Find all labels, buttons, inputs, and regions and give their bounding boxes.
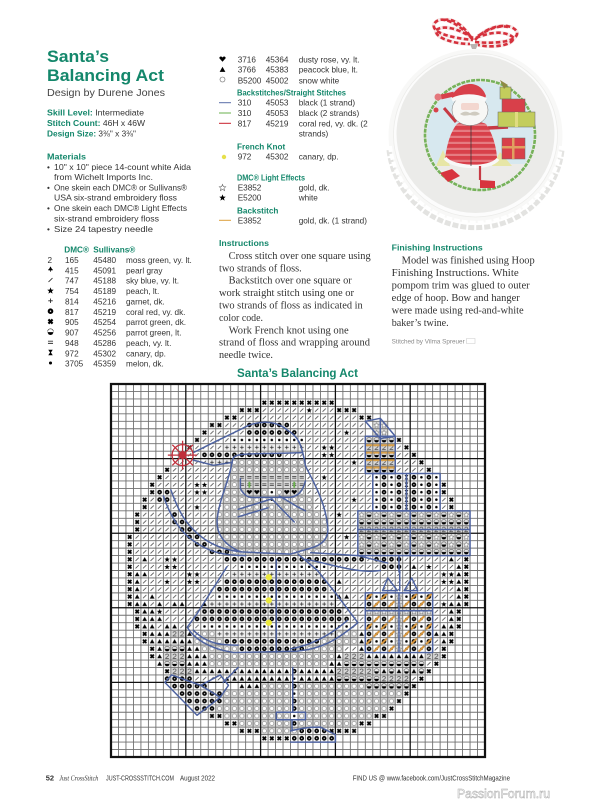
backstitch key: 45053 [266, 109, 289, 118]
chart border [111, 384, 485, 757]
stitched design [425, 80, 535, 194]
materials list: One skein each DMC® or Sullivans® [54, 183, 187, 192]
chart: santa face stitches [216, 459, 328, 556]
light effects key: DMC® Light Effects [237, 174, 305, 183]
instructions: two strands of floss as indicated in [219, 301, 363, 312]
floss key continued: 45002 [266, 76, 289, 85]
backstitch key: strands) [299, 130, 329, 139]
instructions: Backstitch over one square or [229, 276, 352, 287]
floss color key table: 817 [65, 308, 79, 317]
page number: 52 [46, 773, 54, 782]
gifts [498, 80, 535, 159]
title: Santa’s [47, 47, 109, 66]
chart: red gift stitches [373, 474, 440, 511]
hoop with pompom trim [388, 49, 562, 228]
designer credit: Design by Durene Jones [47, 87, 165, 99]
chart: red star pompom [168, 441, 197, 470]
backstitch key: 310 [238, 109, 252, 118]
project specs: Design Size: 3⅜" x 3⅜" [47, 129, 136, 138]
floss key continued: 3716 [238, 55, 256, 64]
finishing text: pompom trim was glued to outer [392, 281, 530, 292]
floss color key table: 45216 [93, 298, 117, 306]
floss color key table: 972 [65, 349, 79, 358]
project specs [47, 109, 145, 138]
floss color key table: 45188 [93, 277, 117, 286]
chart: hat and coat flower stripes [156, 421, 403, 742]
materials list: USA six-strand embroidery floss [54, 194, 177, 203]
materials list: • [47, 225, 50, 234]
materials list: • [47, 163, 50, 172]
floss color key table: peach, lt. [126, 287, 159, 296]
materials list [47, 163, 191, 234]
twine bow and hanger [434, 20, 517, 49]
floss color key table: 948 [65, 339, 79, 348]
floss key continued: peacock blue, lt. [299, 66, 358, 75]
instructions: Work French knot using one [229, 325, 349, 336]
materials list: from Wichelt Imports Inc. [54, 173, 153, 182]
light effects key [219, 174, 367, 226]
french knot key: 972 [238, 153, 252, 162]
panel: key continued and instructions column [219, 55, 371, 361]
light effects key: white [298, 194, 318, 203]
chart: boot stitches [163, 675, 223, 712]
chart: lower gift stitches [365, 593, 433, 653]
floss color key table: 3705 [65, 360, 84, 369]
backstitch key: black (1 strand) [299, 99, 355, 108]
stitcher credit: Stitched by Vilma Spreuer [392, 338, 465, 345]
floss color key table: 814 [65, 298, 79, 306]
chart title: Santa’s Balancing Act [237, 368, 358, 380]
light effects key: Backstitch [237, 207, 278, 216]
backstitch key: 817 [238, 119, 252, 128]
materials list: • [47, 204, 50, 213]
floss color key table: moss green, vy. lt. [126, 256, 192, 265]
panel: finishing instructions [392, 244, 535, 345]
floss color key table: parrot green, lt. [126, 329, 182, 338]
light effects key: E3852 [238, 217, 262, 226]
chart: coat plus stripes [208, 444, 335, 638]
floss color key table: 747 [65, 277, 79, 286]
chart: parrot green stitches [163, 436, 470, 690]
backstitch key: 45219 [266, 119, 289, 128]
floss color key table: 2 [48, 256, 52, 265]
floss color key table: 45254 [93, 318, 117, 327]
floss color key table: coral red, vy. dk. [126, 308, 185, 317]
floss key continued: snow white [299, 76, 340, 85]
floss color key table: 45480 [93, 256, 117, 265]
floss key continued [219, 55, 360, 85]
instructions: Instructions [219, 239, 269, 248]
panel: pattern info column [47, 47, 192, 369]
floss color key table: 415 [65, 266, 79, 275]
french knot key: French Knot [237, 142, 285, 151]
chart: coat dot stripes [201, 436, 350, 720]
floss key continued: 3766 [238, 66, 256, 75]
facebook link: FIND US @ www.facebook.com/JustCrossStitchMagazine [353, 773, 510, 782]
floss color key table: 45256 [93, 329, 117, 338]
floss key continued: 45383 [266, 66, 289, 75]
backstitch key: 45053 [266, 99, 289, 108]
floss color key table: 45286 [93, 339, 117, 348]
icon: finish mark [466, 338, 475, 344]
floss color key table: melon, dk. [126, 360, 164, 369]
light effects key: gold, dk. (1 strand) [299, 217, 367, 226]
finishing text: baker’s twine. [392, 318, 449, 329]
cross stitch chart [111, 384, 485, 757]
project specs: Skill Level: Intermediate [47, 109, 144, 118]
finishing text: Model was finished using Hoop [402, 255, 535, 266]
finishing heading: Finishing Instructions [392, 244, 483, 253]
light effects key: E5200 [238, 194, 262, 203]
chart: santa backstitch outlines [163, 418, 470, 742]
photo: finished hoop ornament [388, 20, 562, 228]
backstitch key: black (2 strands) [299, 109, 359, 118]
materials list: Size 24 tapestry needle [54, 225, 154, 234]
floss color key table: sky blue, vy. lt. [126, 277, 179, 286]
floss color key table: 165 [65, 256, 79, 265]
santa [434, 84, 508, 188]
materials list: • [47, 183, 50, 192]
finishing text [392, 255, 535, 329]
chart: green gift stitches [358, 511, 470, 548]
instructions: Cross stitch over one square using [229, 251, 371, 262]
floss color key table [47, 245, 192, 369]
materials list: 10" x 10" piece 14-count white Aida [54, 163, 191, 172]
floss color key table: parrot green, dk. [126, 318, 186, 327]
floss color key table: peach, vy. lt. [126, 339, 171, 348]
floss key continued: 45364 [266, 55, 289, 64]
chart: face details [238, 474, 305, 503]
website: JUST-CROSSSTITCH.COM [106, 773, 174, 782]
chart: sky background stitches [133, 406, 463, 682]
footer [46, 773, 550, 800]
finishing text: Finishing Instructions. White [392, 268, 519, 279]
chart: snow stitches [216, 682, 403, 735]
backstitch key: 310 [238, 99, 252, 108]
french knot key: 45302 [266, 153, 289, 162]
project specs: Stitch Count: 46H x 46W [47, 119, 145, 128]
instructions: color code. [219, 313, 263, 324]
instructions: work straight stitch using one or [219, 288, 355, 299]
floss color key table: 45219 [93, 308, 117, 317]
chart: gold backstitch on top gift [365, 445, 395, 468]
backstitch key: coral red, vy. dk. (2 [299, 119, 368, 128]
materials list: One skein each DMC® Light Effects [54, 204, 187, 213]
floss color key table: 45091 [93, 266, 117, 275]
materials heading: Materials [47, 152, 86, 161]
chart grid lines [111, 384, 485, 757]
french knot key: canary, dp. [299, 153, 339, 162]
instructions: needle twice. [219, 350, 273, 361]
floss color key table: 905 [65, 318, 79, 327]
instructions: strand of floss and wrapping around [219, 338, 370, 349]
chart: french knots [266, 574, 272, 626]
floss color key table: 754 [65, 287, 79, 296]
chart: moss green stitches [163, 444, 470, 682]
finishing text: were made using red-and-white [392, 305, 524, 316]
instructions: two strands of floss. [219, 263, 302, 274]
floss key continued: dusty rose, vy. lt. [299, 55, 360, 64]
floss color key table: Sullivans® [93, 245, 135, 254]
title: Balancing Act [47, 66, 164, 85]
floss color key table: canary, dp. [126, 349, 166, 358]
issue date: August 2022 [180, 773, 215, 782]
backstitch key: Backstitches/Straight Stitches [237, 89, 346, 98]
floss color key table: garnet, dk. [126, 298, 165, 306]
backstitch key [219, 89, 368, 139]
floss color key table: 45359 [93, 360, 117, 369]
light effects key: E3852 [238, 184, 262, 193]
finishing text: edge of hoop. Bow and hanger [392, 293, 520, 304]
floss color key table: 907 [65, 329, 79, 338]
floss color key table: 45189 [93, 287, 117, 296]
french knot key [222, 142, 339, 162]
chart: sparse star stitches [156, 406, 455, 615]
floss color key table: DMC® [64, 245, 89, 254]
materials list: six-strand embroidery floss [54, 214, 159, 223]
instructions [219, 239, 371, 361]
floss color key table: pearl gray [126, 266, 163, 275]
title [47, 47, 164, 85]
magazine name: Just CrossStitch [59, 773, 98, 782]
floss key continued: B5200 [238, 76, 262, 85]
chart: circular border stitches [126, 399, 470, 742]
chart: triangle stitches [133, 556, 463, 690]
chart: beard lower stitches [193, 630, 358, 667]
light effects key: gold, dk. [299, 184, 330, 193]
floss color key table: 45302 [93, 349, 117, 358]
